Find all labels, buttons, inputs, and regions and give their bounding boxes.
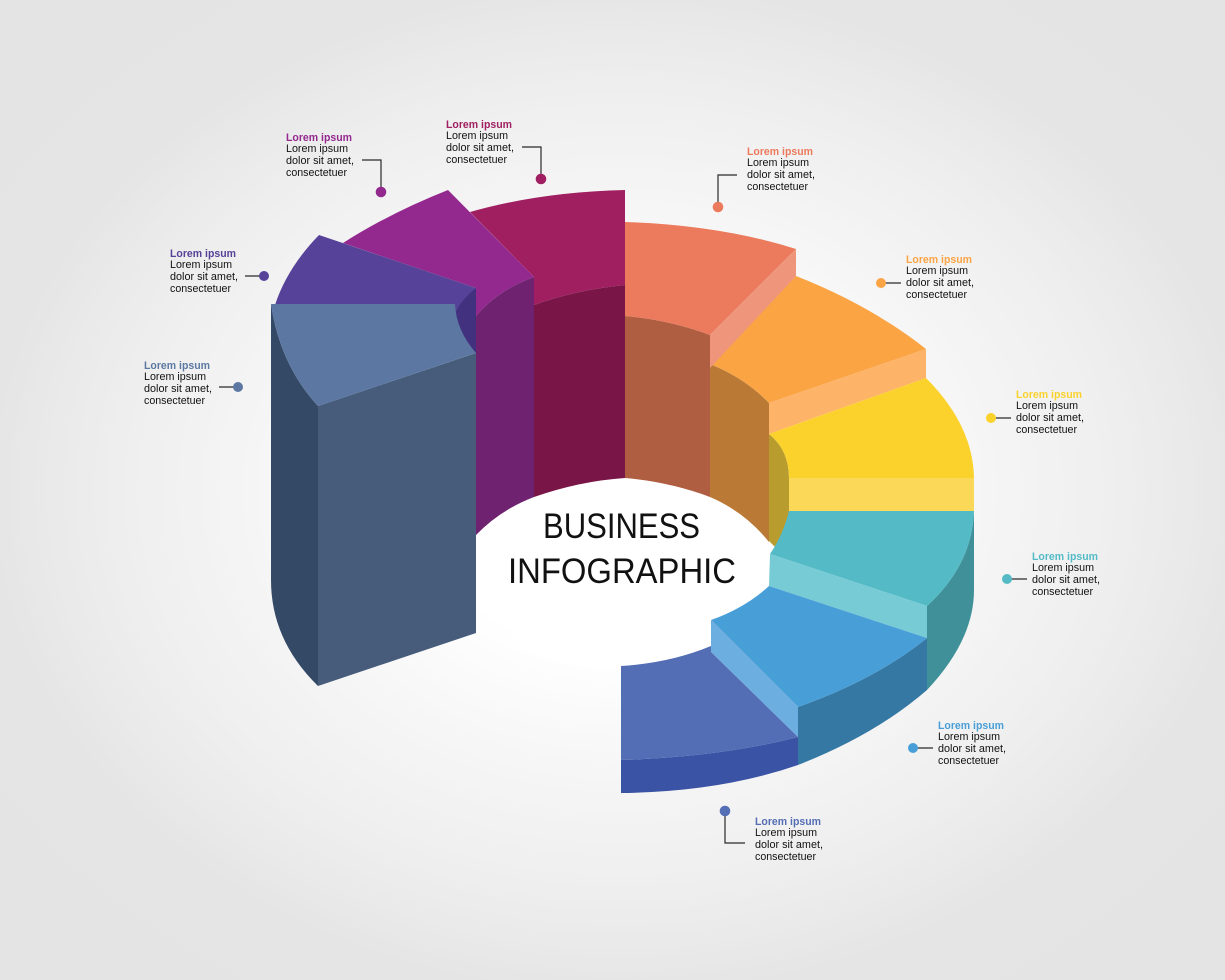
callout: teal: Lorem ipsum [1032,551,1098,563]
segment: magenta [343,190,534,535]
callout: yellow: consectetuer [1016,424,1077,436]
callout: slate: Lorem ipsum [144,360,210,372]
callout: indigo [720,806,823,863]
callout: yellow: Lorem ipsum [1016,389,1082,401]
callout: blue [908,720,1006,767]
callout: indigo: dolor sit amet, [755,839,823,851]
callout: yellow: Lorem ipsum [1016,400,1078,412]
title: BUSINESS [543,507,700,546]
callout: slate: consectetuer [144,395,205,407]
callout: violet [170,248,269,295]
callout: magenta: consectetuer [286,167,347,179]
segment: crimson [470,190,625,497]
callout: magenta: dolor sit amet, [286,155,354,167]
callout: slate [144,360,243,407]
callout: orange [876,254,974,301]
segment: yellow [769,378,974,547]
callout: coral: Lorem ipsum [747,157,809,169]
callout: blue: consectetuer [938,755,999,767]
title [508,507,736,591]
segment: slate [271,304,476,686]
callout: magenta [286,132,386,197]
segment: orange [710,276,926,542]
callout: slate: Lorem ipsum [144,371,206,383]
callout: slate: dolor sit amet, [144,383,212,395]
callout: violet: dolor sit amet, [170,271,238,283]
callout: blue: Lorem ipsum [938,720,1004,732]
callout: teal: consectetuer [1032,586,1093,598]
callout: coral: dolor sit amet, [747,169,815,181]
callout: violet: Lorem ipsum [170,259,232,271]
segment: teal [769,511,974,690]
callout: crimson: dolor sit amet, [446,142,514,154]
callout: violet: Lorem ipsum [170,248,236,260]
callout: crimson: Lorem ipsum [446,119,512,131]
callout: orange: Lorem ipsum [906,265,968,277]
callout: teal [1002,551,1100,598]
callout: teal: dolor sit amet, [1032,574,1100,586]
ring chart [271,190,974,793]
callout: coral: Lorem ipsum [747,146,813,158]
callout: crimson: consectetuer [446,154,507,166]
segment: violet [275,235,476,353]
callout: indigo: Lorem ipsum [755,816,821,828]
callout: orange: consectetuer [906,289,967,301]
callout: blue: Lorem ipsum [938,731,1000,743]
callout: coral [713,146,815,212]
title: INFOGRAPHIC [508,552,736,591]
callout: teal: Lorem ipsum [1032,562,1094,574]
callout: orange: Lorem ipsum [906,254,972,266]
callout: orange: dolor sit amet, [906,277,974,289]
callout: violet: consectetuer [170,283,231,295]
callout: blue: dolor sit amet, [938,743,1006,755]
callout: indigo: Lorem ipsum [755,827,817,839]
callout: crimson: Lorem ipsum [446,130,508,142]
centre opening [452,460,792,670]
callout: indigo: consectetuer [755,851,816,863]
callout: coral: consectetuer [747,181,808,193]
segment: coral [625,222,796,497]
callout: yellow [986,389,1084,436]
callout: magenta: Lorem ipsum [286,132,352,144]
segment: indigo [621,646,798,793]
callout: crimson [446,119,546,184]
segment: blue [711,586,927,765]
callout: yellow: dolor sit amet, [1016,412,1084,424]
callout: magenta: Lorem ipsum [286,143,348,155]
